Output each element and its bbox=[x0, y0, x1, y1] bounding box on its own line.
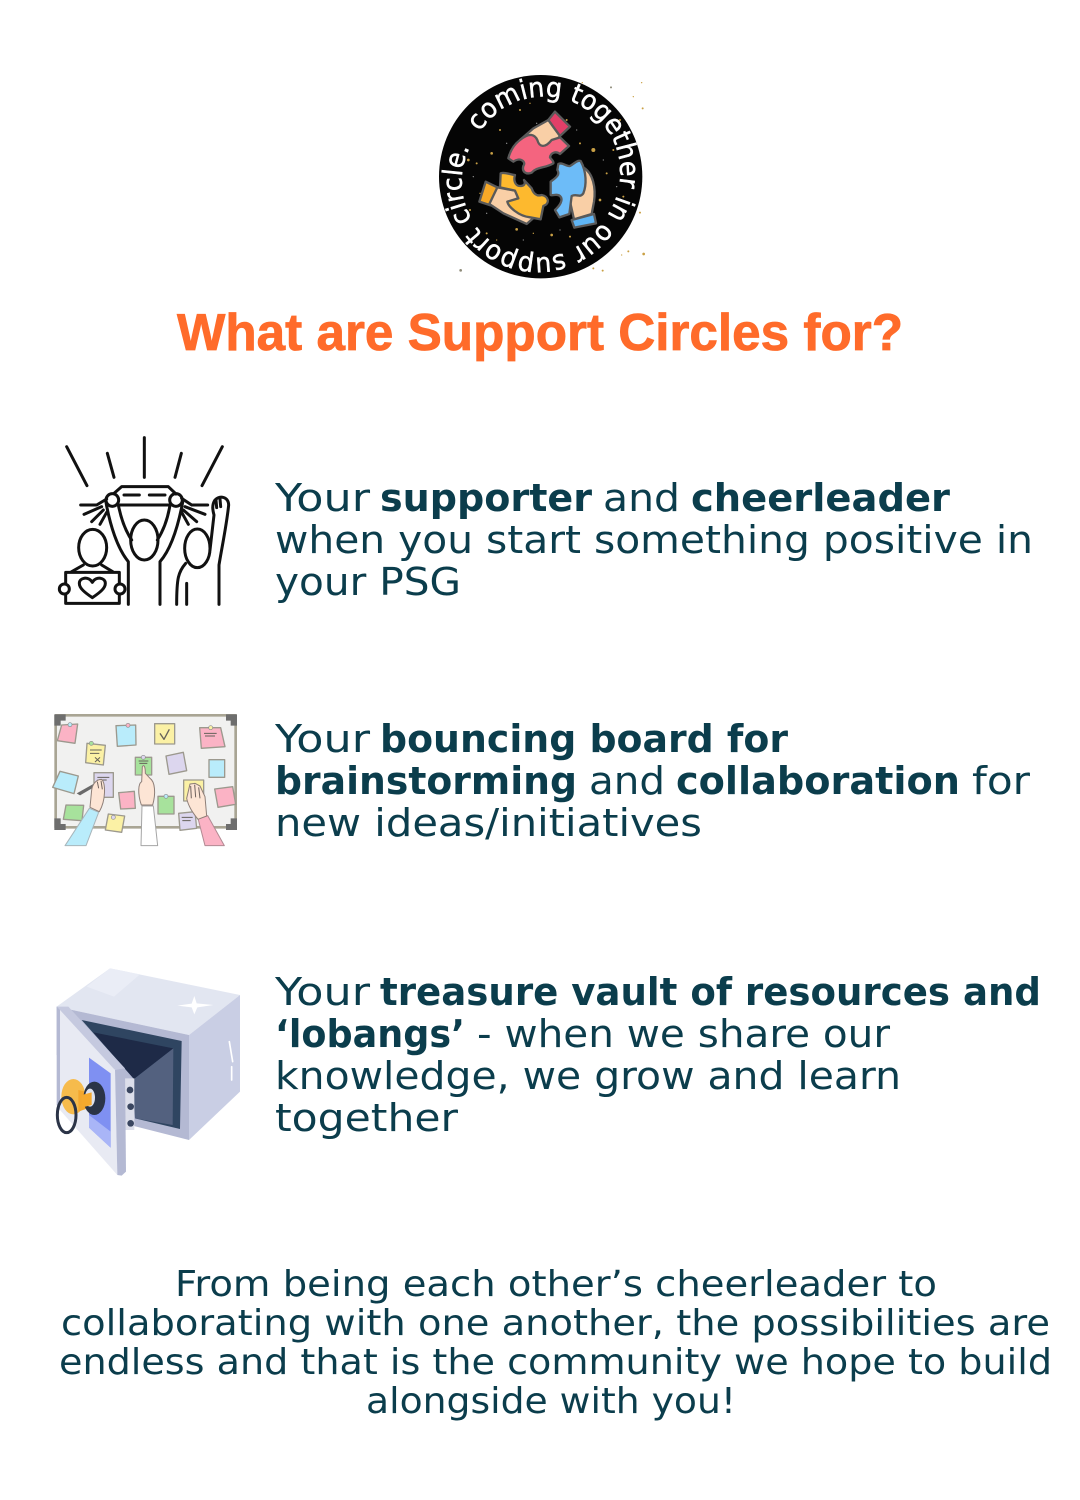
puzzle hand: yellow bbox=[479, 173, 548, 224]
closing statement bbox=[59, 1264, 1052, 1422]
logo ring text: coming together in our support circle. bbox=[441, 78, 637, 273]
arm: middle bbox=[141, 806, 158, 846]
arm: right bbox=[198, 816, 224, 846]
text: supporter and cheerleader bbox=[274, 476, 1033, 604]
closing statement: collaborating with one another, the possibilities are bbox=[61, 1303, 1050, 1344]
text: treasure vault: ‘lobangs’ bbox=[275, 1012, 465, 1056]
text: supporter and cheerleader: cheerleader bbox=[691, 476, 950, 520]
closing statement: endless and that is the community we hope to build bbox=[59, 1342, 1052, 1383]
text: bouncing board, brainstorming and collaboration: new ideas/initiatives bbox=[275, 801, 702, 845]
closing statement: alongside with you! bbox=[366, 1381, 736, 1422]
closing statement: From being each other’s cheerleader to bbox=[175, 1264, 937, 1305]
logo: support circle badge bbox=[439, 75, 645, 278]
text: bouncing board, brainstorming and collaboration bbox=[274, 717, 1030, 845]
icon: bulletin board with hands bbox=[53, 714, 237, 846]
text: supporter and cheerleader: and bbox=[603, 476, 680, 520]
text: bouncing board, brainstorming and collaboration: brainstorming bbox=[275, 759, 577, 803]
text: treasure vault: - when we share our bbox=[477, 1012, 890, 1056]
text: treasure vault: knowledge, we grow and learn bbox=[275, 1054, 901, 1098]
text: supporter and cheerleader: your PSG bbox=[275, 560, 461, 604]
puzzle hand: pink bbox=[508, 112, 570, 173]
icon: cheering people bbox=[59, 438, 229, 604]
text: supporter and cheerleader: when you start something positive in bbox=[275, 518, 1033, 562]
text: bouncing board, brainstorming and collaboration: Your bbox=[274, 717, 370, 761]
text: bouncing board, brainstorming and collaboration: collaboration bbox=[676, 759, 960, 803]
text: treasure vault: treasure vault of resources and bbox=[380, 970, 1041, 1014]
text: treasure vault: Your bbox=[274, 970, 370, 1014]
title: What are Support Circles for? bbox=[177, 304, 903, 362]
text: supporter and cheerleader: supporter bbox=[380, 476, 592, 520]
text: supporter and cheerleader: Your bbox=[274, 476, 370, 520]
icon: open safe with key bbox=[57, 968, 240, 1176]
text: bouncing board, brainstorming and collaboration: for bbox=[972, 759, 1030, 803]
text: bouncing board, brainstorming and collaboration: and bbox=[589, 759, 665, 803]
text: treasure vault: together bbox=[275, 1096, 458, 1140]
text: treasure vault bbox=[274, 970, 1041, 1140]
puzzle hand: blue bbox=[551, 161, 596, 228]
arm: left bbox=[65, 808, 99, 846]
safe door bbox=[57, 1007, 125, 1070]
text: bouncing board, brainstorming and collaboration: bouncing board for bbox=[380, 717, 788, 761]
